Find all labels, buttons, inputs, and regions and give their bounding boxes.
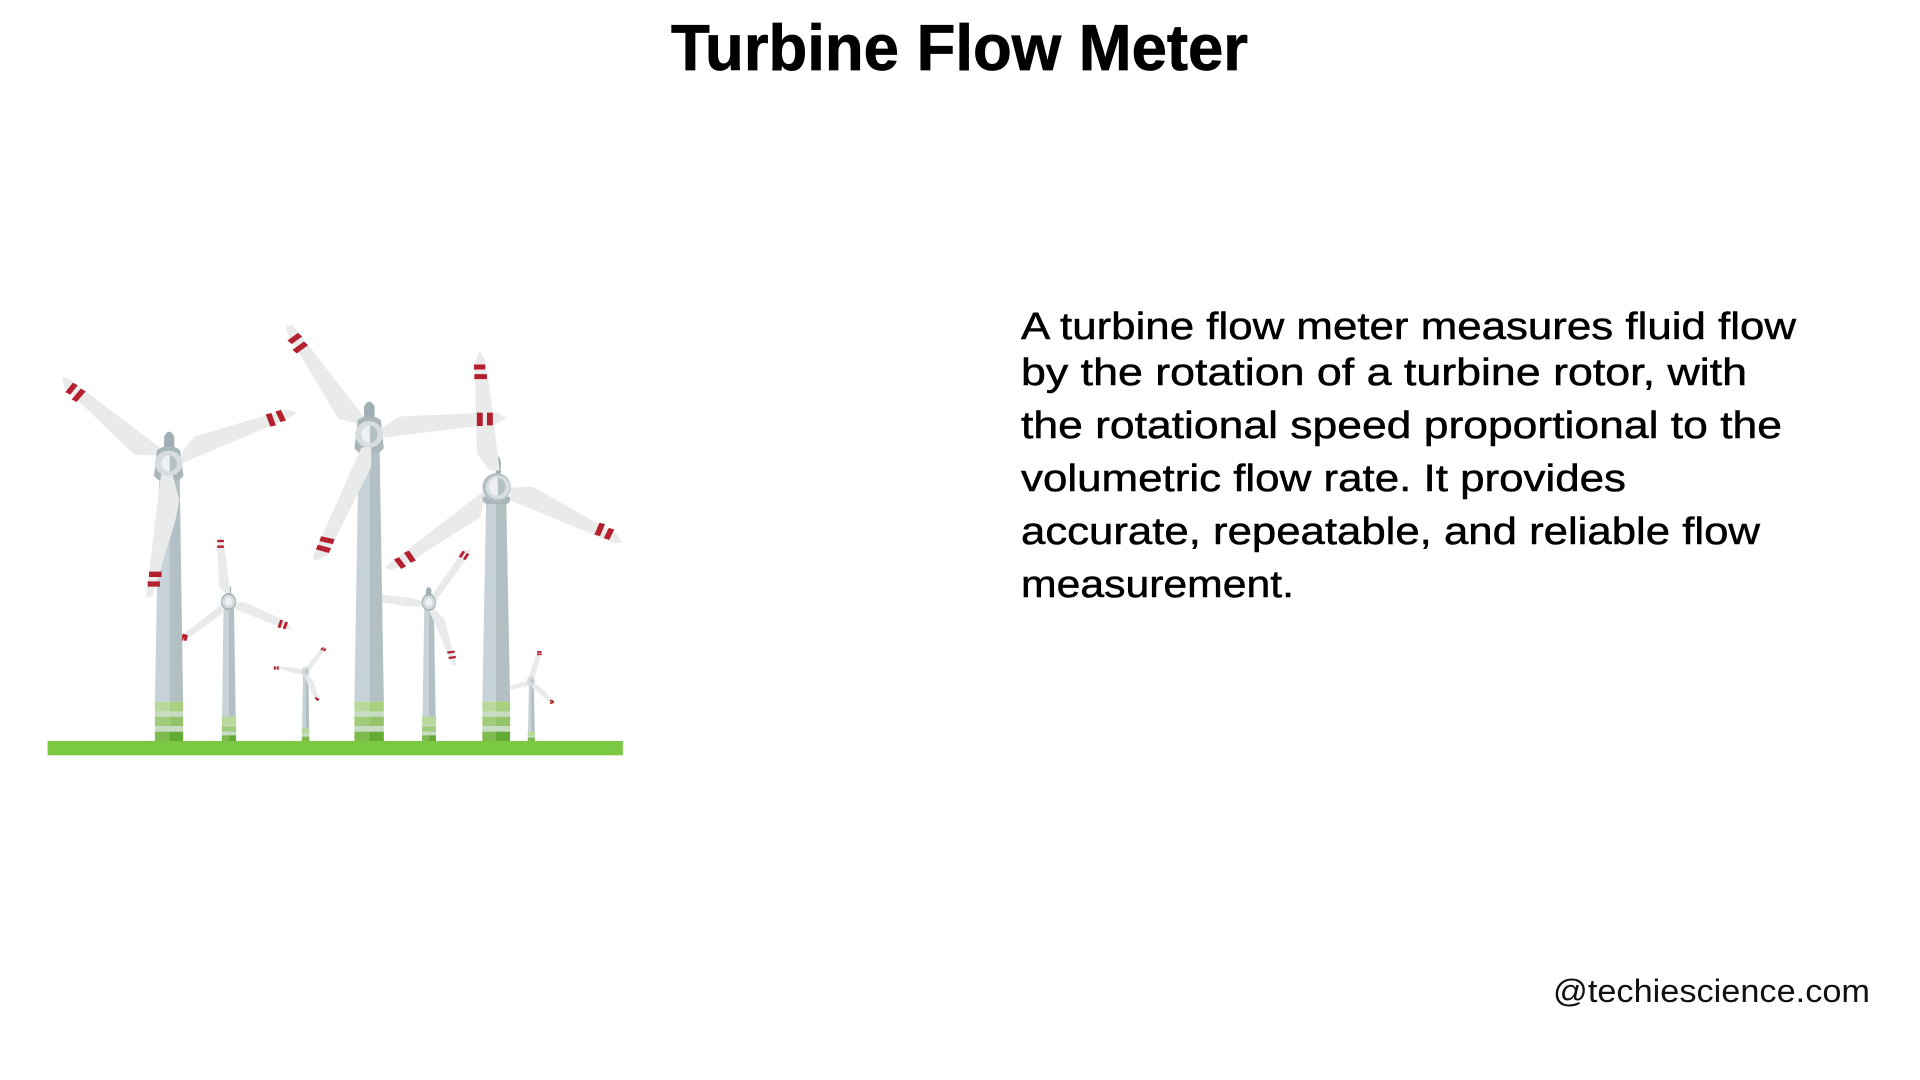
description paragraph bbox=[1021, 306, 1797, 606]
large turbine, left bbox=[63, 378, 295, 741]
illustration: wind turbines on green ground bbox=[48, 326, 623, 755]
description paragraph: the rotational speed proportional to the bbox=[1021, 405, 1782, 447]
description paragraph: A turbine flow meter measures fluid flow bbox=[1021, 306, 1797, 348]
large turbine, right bbox=[386, 352, 621, 741]
green ground strip bbox=[48, 741, 623, 755]
tiny turbine, far right bbox=[509, 651, 554, 741]
description paragraph: volumetric flow rate. It provides bbox=[1021, 458, 1626, 500]
description paragraph: accurate, repeatable, and reliable flow bbox=[1021, 511, 1761, 553]
description paragraph: measurement. bbox=[1021, 564, 1294, 606]
large turbine, centre bbox=[287, 326, 505, 741]
small turbine, centre right bbox=[382, 549, 470, 741]
description paragraph: by the rotation of a turbine rotor, with bbox=[1021, 352, 1747, 394]
title: Turbine Flow Meter bbox=[671, 11, 1248, 84]
small turbine, second from left bbox=[181, 536, 290, 741]
watermark: @techiescience.com bbox=[1553, 973, 1870, 1009]
tiny turbine, centre left bbox=[275, 647, 326, 741]
